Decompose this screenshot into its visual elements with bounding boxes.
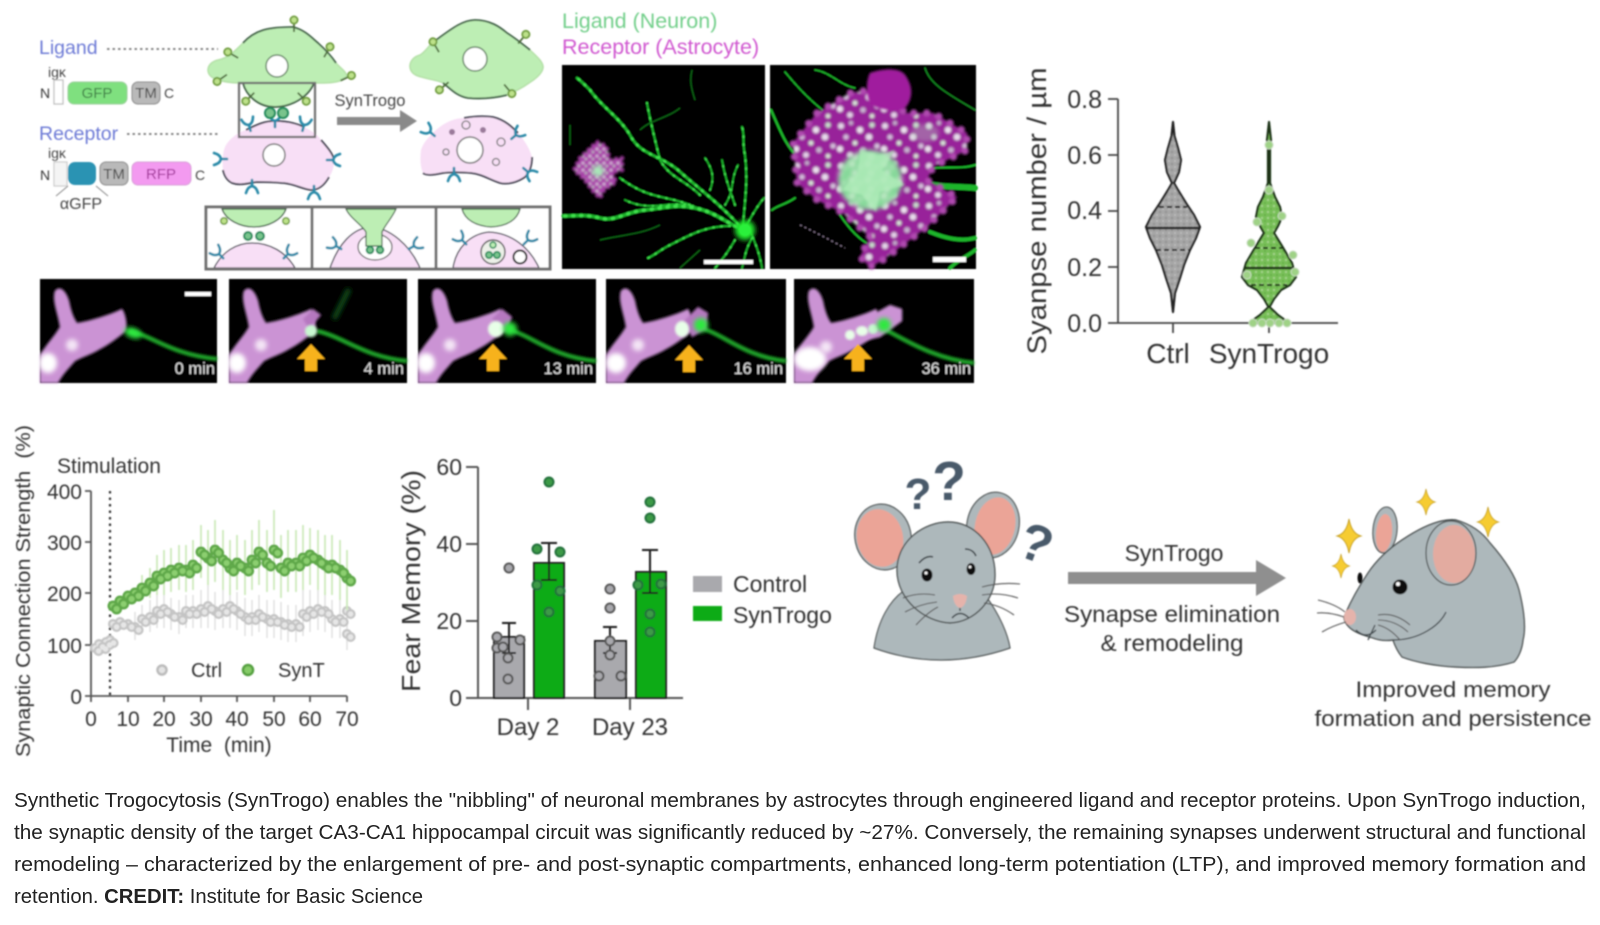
arrow: SynTrogo [335,92,417,132]
line chart: synaptic connection strength: 0 [70,686,82,709]
bars [494,563,666,698]
scale bar [933,257,966,262]
frame 36 min [794,279,974,383]
violin: Ctrl [1146,122,1200,369]
violin chart: synapse number: 0.4 [1067,197,1102,225]
frame 36 min: 36 min [921,360,971,378]
schematic: ligand and receptor constructs [39,37,218,213]
label: ligand construct: GFP [82,85,112,102]
line chart: synaptic connection strength: 0 [85,708,97,731]
bar chart: fear memory: Fear Memory (%) [396,470,426,692]
arrow [479,344,507,371]
bar chart: fear memory: 40 [436,531,462,557]
violin chart: synapse number: 0.2 [1067,254,1102,282]
question marks: ? [905,470,931,519]
schematic: cells after SynTrogo [410,20,543,184]
sparkles [1333,489,1498,578]
label: ligand construct: N [40,85,50,101]
illustration: confused mouse [849,450,1061,660]
line chart: synaptic connection strength: 300 [47,532,82,555]
time-lapse strip [39,279,974,383]
frame 4 min: 4 min [364,360,404,378]
line chart: synaptic connection strength: 40 [225,708,249,731]
caption text [14,789,1586,908]
frame 0 min [39,279,217,383]
legend: Control [733,571,807,597]
frame 16 min: 16 min [733,360,783,378]
micrograph legend [562,9,759,59]
frame 0 min: 0 min [175,360,215,378]
arrow [675,345,703,372]
micrograph: whole neuron with astrocyte [562,65,765,269]
label: ligand construct: igκ [48,64,67,80]
caption text: Synthetic Trogocytosis (SynTrogo) enables the "nibbling" of neuronal membranes by astrocytes through engineered ligand and receptor proteins. Upon SynTrogo induction, [14,789,1586,812]
question marks [905,450,1061,577]
label: ligand construct: C [164,85,174,101]
line chart: synaptic connection strength: Stimulation [57,455,161,478]
frame 13 min [417,279,596,383]
line chart: synaptic connection strength: 20 [152,708,176,731]
line chart: synaptic connection strength: Synaptic Connection Strength (%) [13,425,35,757]
bar chart: fear memory: 0 [449,685,462,711]
line chart: synaptic connection strength: Time (min) [166,734,272,757]
violin: SynTrogo [1209,122,1329,369]
line chart: synaptic connection strength [13,425,359,757]
step 2 [327,209,423,268]
series: SynT [113,510,351,610]
violin chart: synapse number: 0.0 [1067,310,1102,338]
label: receptor construct: RFP [146,166,176,183]
scale bar [704,260,753,264]
label: ligand construct: Ligand [39,37,98,59]
caption text: retention. CREDIT: Institute for Basic Science [14,885,423,908]
bar chart: fear memory: 60 [436,454,462,480]
arrow: SynTrogo synapse elimination: Synapse elimination [1064,601,1280,627]
bar chart: fear memory [396,454,832,741]
line chart: synaptic connection strength: 60 [298,708,322,731]
illustration: smart mouse: Improved memory [1356,677,1550,702]
line chart: synaptic connection strength: 200 [47,583,82,606]
label: receptor construct: igκ [48,145,67,161]
bar chart: fear memory: 20 [436,608,462,634]
question marks: ? [932,450,966,512]
arrow [844,344,872,371]
contact zoom box [239,83,315,137]
label: ligand construct [39,37,218,104]
scale bar [185,292,211,296]
frame 16 min [606,279,786,383]
label: receptor construct: C [195,167,205,183]
caption text: the synaptic density of the target CA3-CA1 hippocampal circuit was significantly reduced by ~27%. Conversely, the remaining synapses underwent structural and functional [14,821,1586,844]
line chart: synaptic connection strength: 400 [47,481,82,504]
label: receptor construct: TM [103,166,125,183]
violin chart: synapse number: 0.8 [1067,86,1102,114]
series: Ctrl [95,585,351,651]
step 3 [453,209,539,268]
schematic: three-step trogocytosis inset [206,207,550,269]
violin: Ctrl: Ctrl [1146,338,1190,369]
legend: SynTrogo [733,602,832,628]
arrow [297,344,325,371]
legend [158,660,325,682]
frame 13 min: 13 min [543,360,593,378]
neuron cell before [208,16,356,107]
micrograph: astrocyte close-up [770,65,976,269]
arrow: SynTrogo synapse elimination [1064,540,1286,656]
line chart: synaptic connection strength: 30 [189,708,213,731]
violin chart: synapse number: Syanpse number / µm [1022,68,1052,354]
label: ligand construct: TM [135,85,157,102]
legend [693,571,832,628]
legend: Ctrl [191,660,222,682]
astrocyte cell before [214,114,340,199]
legend: SynT [278,660,325,682]
violin chart: synapse number: 0.6 [1067,142,1102,170]
arrow: SynTrogo synapse elimination: SynTrogo [1125,540,1223,566]
line chart: synaptic connection strength: 70 [335,708,359,731]
figure artwork [13,9,1592,757]
arrow: SynTrogo synapse elimination: & remodeling [1100,630,1244,656]
schematic: neuron and astrocyte contact [208,16,356,199]
label: receptor construct: αGFP [60,196,102,213]
bar chart: fear memory: Day 23 [592,714,668,741]
line chart: synaptic connection strength: 10 [116,708,140,731]
neuron after [410,20,543,99]
arrow: SynTrogo: SynTrogo [335,92,405,110]
astrocyte after [420,116,537,184]
micrograph legend: Ligand (Neuron) [562,9,717,33]
label: receptor construct [39,123,218,213]
question marks: ? [1011,511,1061,577]
caption text: remodeling – characterized by the enlargement of pre- and post-synaptic compartments, enhanced long-term potentiation (LTP), and improved memory formation and [14,853,1586,876]
label: receptor construct: N [40,167,50,183]
step 1 [210,209,297,268]
illustration: smart mouse: formation and persistence [1314,706,1592,731]
illustration: smart mouse [1314,489,1592,731]
micrograph legend: Receptor (Astrocyte) [562,35,759,59]
label: receptor construct: Receptor [39,123,119,145]
bar chart: fear memory: Day 2 [497,714,559,741]
violin chart: synapse number [1022,68,1338,369]
violin: SynTrogo: SynTrogo [1209,338,1329,369]
frame 4 min [228,279,407,383]
line chart: synaptic connection strength: 50 [262,708,286,731]
line chart: synaptic connection strength: 100 [47,635,82,658]
